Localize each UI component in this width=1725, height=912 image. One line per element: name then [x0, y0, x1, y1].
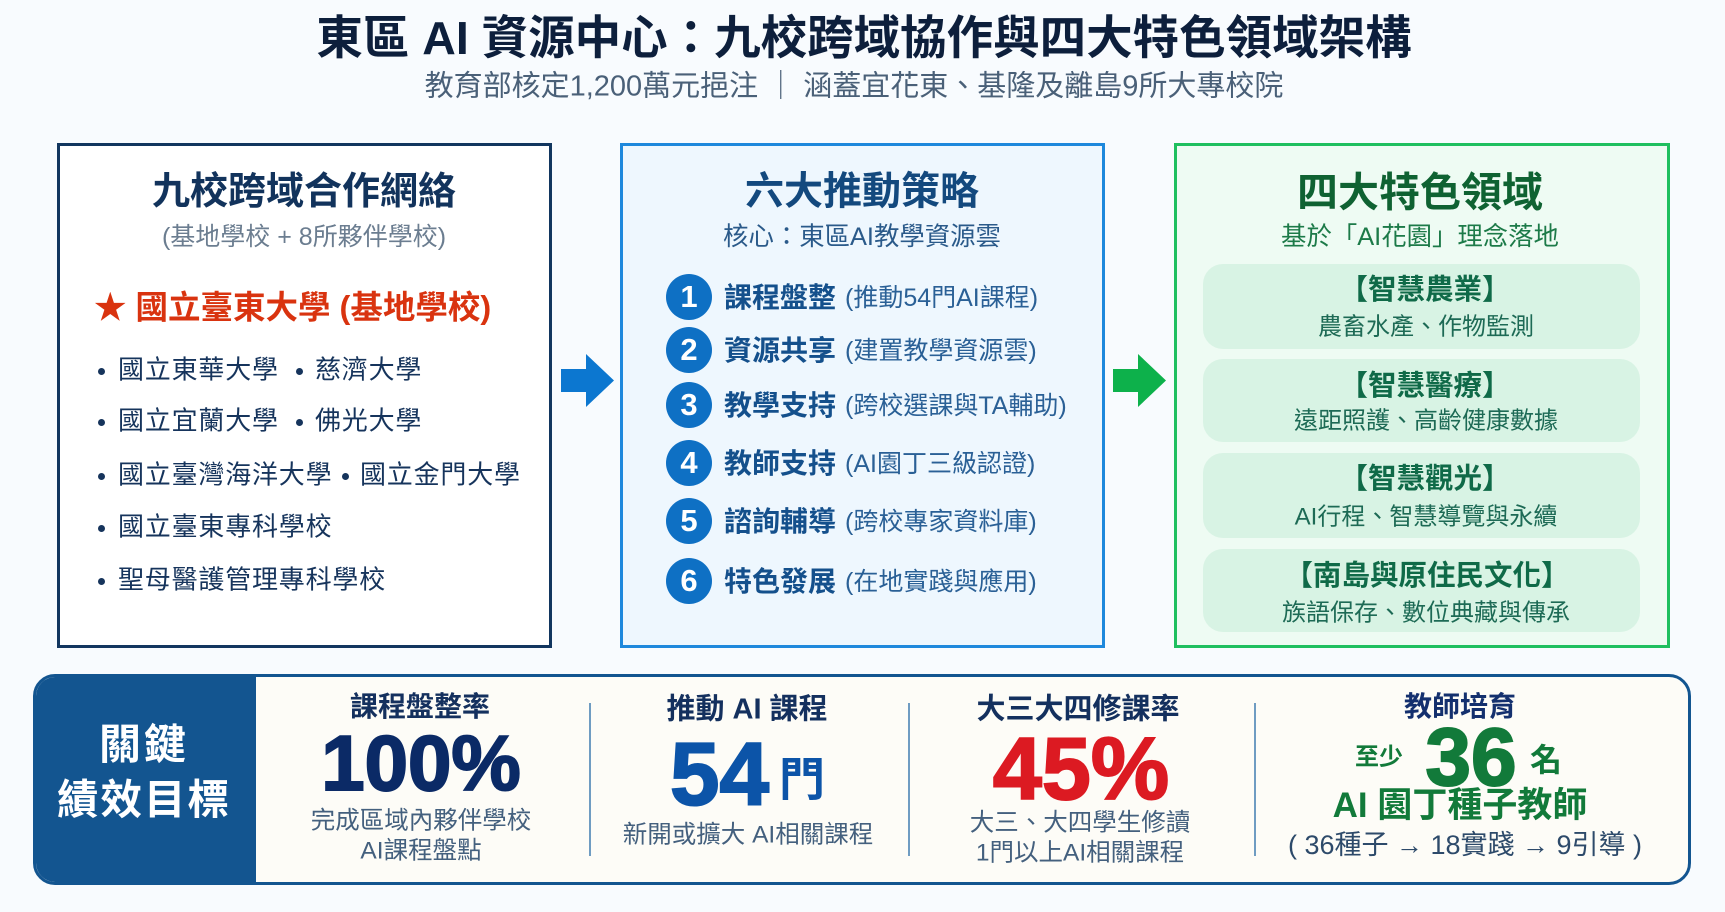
strategy 1: 課程盤整	[724, 282, 836, 313]
school row 1: 國立東華大學	[118, 354, 279, 384]
KPI: junior and senior enrollment: 大三、大四學生修讀	[970, 809, 1190, 836]
KPI label block	[36, 677, 256, 882]
KPI: course inventory rate: 課程盤整率	[350, 691, 490, 722]
KPI: teacher training: AI 園丁種子教師	[1333, 786, 1587, 825]
strategy 3	[666, 382, 1067, 428]
base school highlight: ★ 國立臺東大學 (基地學校)	[94, 290, 491, 326]
KPI: junior and senior enrollment: 45%	[993, 719, 1169, 818]
KPI: AI courses: 新開或擴大 AI相關課程	[623, 821, 873, 848]
KPI label block: 績效目標	[57, 776, 231, 823]
KPI: junior and senior enrollment: 1門以上AI相關課程	[976, 839, 1184, 866]
panel: four domains	[1174, 143, 1670, 648]
school row 5: 聖母醫護管理專科學校	[118, 564, 386, 594]
strategy 1	[666, 274, 1038, 320]
domain card: tourism: 【智慧觀光】	[1339, 463, 1511, 495]
strategy 4	[666, 440, 1035, 486]
school row 1: 慈濟大學	[315, 354, 422, 384]
strategy 6: (在地實踐與應用)	[845, 568, 1037, 596]
KPI: teacher training: 至少	[1355, 744, 1403, 771]
panel: nine-school network	[57, 143, 552, 648]
domain card: medical	[1203, 359, 1640, 442]
strategy 3: 3	[680, 387, 698, 422]
strategy 2: 資源共享	[724, 335, 836, 366]
panel: key performance indicators	[33, 674, 1691, 885]
strategy 2	[666, 327, 1037, 373]
school row 4: 國立臺東專科學校	[118, 511, 332, 541]
panel heading: strategies: 六大推動策略	[745, 171, 979, 214]
domain card: culture	[1203, 549, 1640, 632]
school row 2: 國立宜蘭大學	[118, 405, 279, 435]
strategy 2: (建置教學資源雲)	[845, 337, 1037, 365]
KPI: teacher training: ( 36種子 → 18實踐 → 9引導 )	[1288, 830, 1642, 860]
KPI: teacher training: 名	[1530, 742, 1562, 778]
strategy 4: 4	[680, 445, 698, 480]
KPI: AI courses: 54	[670, 724, 769, 824]
KPI: AI courses: 門	[779, 753, 825, 805]
school row 2: 佛光大學	[315, 405, 422, 435]
domain card: agriculture	[1203, 264, 1640, 349]
KPI: course inventory rate: 完成區域內夥伴學校	[311, 807, 531, 834]
panel heading: domains: 四大特色領域	[1297, 169, 1543, 215]
panel subheading: domains: 基於「AI花園」理念落地	[1281, 223, 1559, 251]
school row 3	[98, 459, 521, 489]
strategy 4: (AI園丁三級認證)	[845, 450, 1035, 478]
school row 2	[98, 405, 422, 435]
domain card: agriculture: 農畜水產、作物監測	[1318, 314, 1534, 341]
title: 東區 AI 資源中心：九校跨域協作與四大特色領域架構	[316, 12, 1412, 64]
domain card: culture: 【南島與原住民文化】	[1284, 560, 1570, 592]
domain card: culture: 族語保存、數位典藏與傳承	[1282, 600, 1570, 627]
strategy 1: 1	[680, 279, 698, 314]
strategy 2: 2	[680, 332, 698, 367]
strategy 1: (推動54門AI課程)	[845, 284, 1038, 312]
panel: six strategies	[620, 143, 1105, 648]
strategy 3: (跨校選課與TA輔助)	[845, 392, 1067, 420]
domain card: medical: 【智慧醫療】	[1339, 370, 1511, 402]
KPI: course inventory rate	[311, 691, 531, 864]
strategy 6: 特色發展	[724, 566, 836, 597]
KPI: course inventory rate: AI課程盤點	[360, 837, 482, 864]
KPI: teacher training	[1288, 691, 1642, 860]
domain card: medical: 遠距照護、高齡健康數據	[1294, 408, 1558, 435]
domain card: agriculture: 【智慧農業】	[1339, 274, 1511, 306]
arrow: network to strategies	[561, 354, 614, 407]
subtitle: 教育部核定1,200萬元挹注 ｜ 涵蓋宜花東、基隆及離島9所大專校院	[425, 71, 1283, 103]
domain card: tourism	[1203, 453, 1640, 538]
panel subheading: network: (基地學校 + 8所夥伴學校)	[162, 223, 446, 251]
KPI: AI courses	[623, 694, 873, 848]
school row 1	[98, 354, 422, 384]
KPI: AI courses: 推動 AI 課程	[666, 694, 828, 726]
strategy 5	[666, 498, 1037, 544]
KPI: teacher training: 36	[1425, 712, 1517, 803]
strategy 5: 諮詢輔導	[724, 506, 836, 537]
panel heading: network: 九校跨域合作網絡	[152, 171, 456, 213]
strategy 5: 5	[680, 503, 698, 538]
KPI: course inventory rate: 100%	[321, 719, 521, 807]
strategy 3: 教學支持	[724, 390, 836, 421]
panel subheading: strategies: 核心：東區AI教學資源雲	[723, 223, 1001, 251]
school row 3: 國立臺灣海洋大學	[118, 459, 332, 489]
KPI: teacher training: 教師培育	[1404, 691, 1516, 722]
strategy 4: 教師支持	[724, 448, 836, 479]
KPI: junior and senior enrollment	[970, 694, 1190, 866]
strategy 5: (跨校專家資料庫)	[845, 508, 1037, 536]
arrow: strategies to domains	[1113, 354, 1166, 407]
domain card: tourism: AI行程、智慧導覽與永續	[1295, 504, 1557, 531]
strategy 6: 6	[680, 563, 698, 598]
KPI label block: 關鍵	[99, 721, 189, 768]
school row 3: 國立金門大學	[360, 459, 521, 489]
strategy 6	[666, 558, 1037, 604]
KPI: junior and senior enrollment: 大三大四修課率	[976, 694, 1180, 726]
